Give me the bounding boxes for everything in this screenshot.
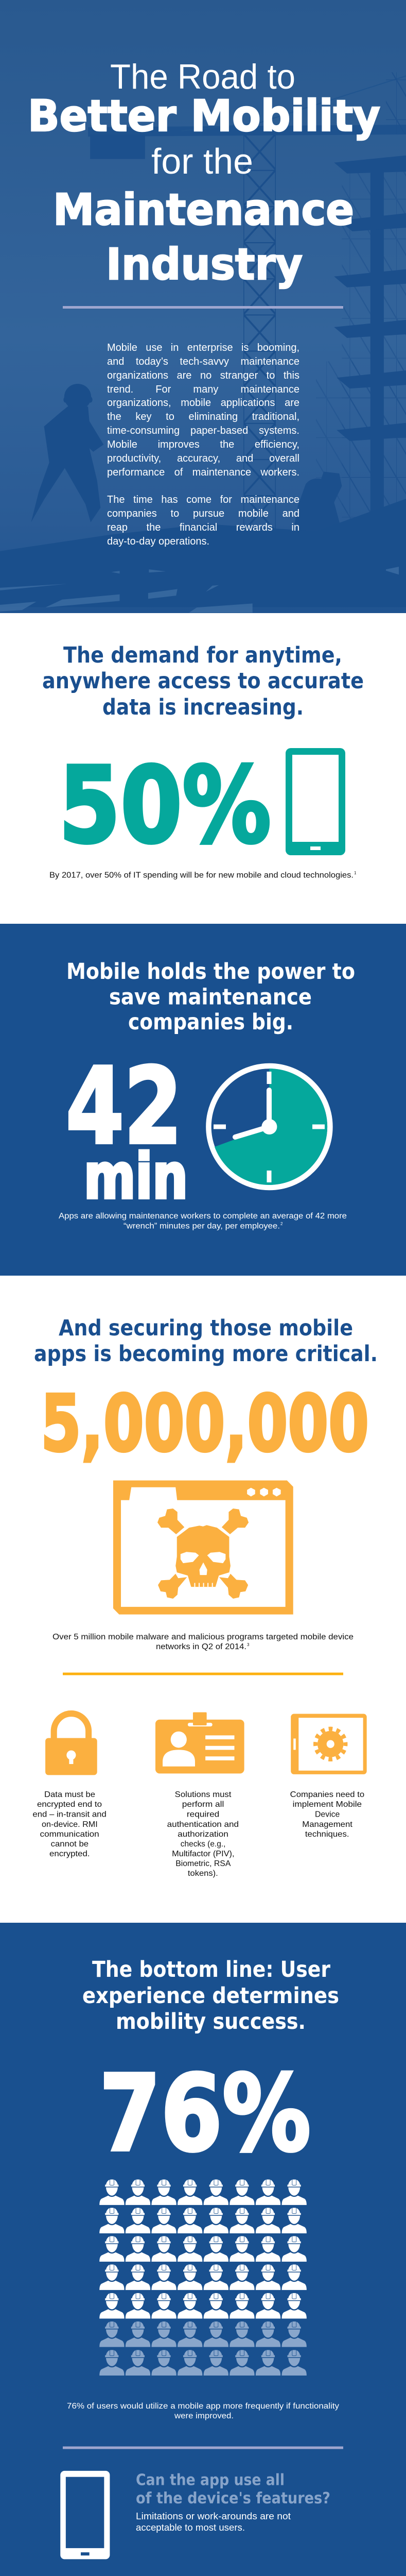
text: device management: techniques. (305, 1830, 349, 1839)
heading: save: save maintenance (109, 985, 312, 1010)
heading: bottom line: The bottom line: User (92, 1957, 330, 1982)
heading: bottom line (82, 1957, 339, 2035)
panel: hero header (0, 0, 406, 613)
text: encryption: end – in-transit and (32, 1810, 107, 1819)
intro paragraph: reap the financial rewards in (107, 522, 299, 533)
caption: 42 min: Apps are allowing maintenance workers to complete an average of 42 more (59, 1212, 347, 1221)
stat: 50%: 50% (59, 745, 271, 867)
intro paragraph: Mobile improves the efficiency, (107, 439, 299, 450)
intro paragraph: Mobile use in enterprise is booming, (107, 342, 299, 353)
text: authentication (167, 1790, 239, 1878)
panel: bottom line (0, 1923, 406, 2576)
caption: 42 min (59, 1212, 347, 1230)
heading: demand (42, 643, 364, 720)
title: for the (151, 141, 253, 181)
stat: 42 min (66, 1046, 188, 1213)
caption: malware: networks in Q2 of 2014. (156, 1642, 246, 1651)
text: authentication: tokens). (188, 1869, 218, 1878)
icon: padlock (45, 1714, 97, 1775)
heading: save (66, 959, 355, 1035)
intro paragraph: organizations are no stranger to this (107, 370, 299, 381)
text: encryption (32, 1790, 107, 1858)
text: device management (290, 1790, 364, 1839)
intro paragraph: trend. For many maintenance (107, 384, 299, 395)
intro paragraph: the key to eliminating traditional, (107, 411, 299, 422)
text: device management: Device (315, 1810, 340, 1819)
question: device features: acceptable to most users. (136, 2522, 245, 2533)
heading: bottom line: experience determines (82, 1984, 339, 2009)
heading: save: companies big. (128, 1010, 293, 1035)
heading: securing: And securing those mobile (59, 1316, 353, 1341)
caption: malware (52, 1633, 354, 1651)
heading: demand: The demand for anytime, (63, 643, 342, 668)
caption: malware: Over 5 million mobile malware and malicious programs targeted mobile device (52, 1633, 354, 1641)
icon: phone (286, 748, 345, 855)
intro paragraph: time-consuming paper-based systems. (107, 425, 299, 436)
text: authentication: authentication and (167, 1820, 239, 1829)
caption: 76% (67, 2402, 339, 2420)
panel: save big (0, 924, 406, 1276)
intro paragraph: The time has come for maintenance (107, 494, 299, 505)
pictogram: worker grid (99, 2179, 307, 2376)
heading: save: Mobile holds the power to (66, 959, 355, 985)
stat: 76%: 76% (99, 2053, 311, 2175)
text: authentication: Biometric, RSA (175, 1859, 231, 1868)
icon: tablet with gear (291, 1714, 367, 1774)
text: device management: Management (302, 1820, 352, 1829)
caption: malware: 3 (247, 1642, 250, 1647)
intro paragraph: day-to-day operations. (107, 536, 209, 547)
text: encryption: on-device. RMI (42, 1820, 98, 1829)
intro paragraph: organizations, mobile applications are (107, 397, 299, 409)
text: device management: Companies need to (290, 1790, 364, 1799)
intro paragraph: productivity, accuracy, and overall (107, 453, 299, 464)
stat: 42 min: min (84, 1141, 188, 1213)
title: Better Mobility (28, 91, 380, 141)
text: authentication: required (187, 1810, 219, 1819)
question: device features (136, 2471, 330, 2533)
icon: malware skull window (113, 1480, 293, 1615)
panel: securing apps (32, 1316, 378, 1878)
question: device features: Limitations or work-arounds are not (136, 2511, 291, 2521)
heading: demand: anywhere access to accurate (42, 669, 364, 694)
heading: bottom line: mobility success. (116, 2009, 306, 2035)
caption: 50%: 1 (354, 871, 357, 875)
text: encryption: Data must be (44, 1790, 95, 1799)
icon: white phone (60, 2471, 110, 2559)
text: authentication: authorization (178, 1830, 228, 1839)
text: device management: implement Mobile (293, 1800, 362, 1809)
icon: clock (208, 1066, 330, 1188)
title: The Road to (110, 57, 295, 96)
stat: 42 min: 42 (66, 1046, 182, 1168)
intro paragraph: and today’s tech-savvy maintenance (107, 356, 299, 367)
text: authentication: checks (e.g., (181, 1840, 225, 1849)
title (28, 57, 380, 290)
text: encryption: encrypted end to (37, 1800, 102, 1809)
caption: 50%: By 2017, over 50% of IT spending will be for new mobile and cloud technologies. (49, 871, 354, 880)
title: Maintenance (53, 184, 354, 235)
text: encryption: cannot be (51, 1840, 89, 1849)
caption: 76%: were improved. (174, 2412, 234, 2420)
panel: demand for access (0, 613, 406, 924)
heading: demand: data is increasing. (102, 695, 304, 720)
text: authentication: Multifactor (PIV), (172, 1850, 235, 1858)
text: encryption: communication (40, 1830, 99, 1839)
text: encryption: encrypted. (49, 1850, 90, 1858)
icon: id badge (155, 1712, 244, 1773)
title: Industry (106, 239, 303, 290)
caption: 76%: 76% of users would utilize a mobile app more frequently if functionality (67, 2402, 339, 2411)
caption: 42 min: “wrench” minutes per day, per employee. (123, 1222, 280, 1230)
hero background: construction silhouette (0, 0, 406, 613)
caption: 42 min: 2 (280, 1222, 283, 1226)
question: device features: of the device's features? (136, 2489, 330, 2507)
intro paragraph: performance of maintenance workers. (107, 467, 299, 478)
intro paragraph (107, 341, 301, 552)
heading: securing (34, 1316, 378, 1367)
intro paragraph: companies to pursue mobile and (107, 508, 299, 519)
text: authentication: perform all (182, 1800, 224, 1809)
question: device features: Can the app use all (136, 2471, 285, 2489)
text: authentication: Solutions must (175, 1790, 232, 1799)
